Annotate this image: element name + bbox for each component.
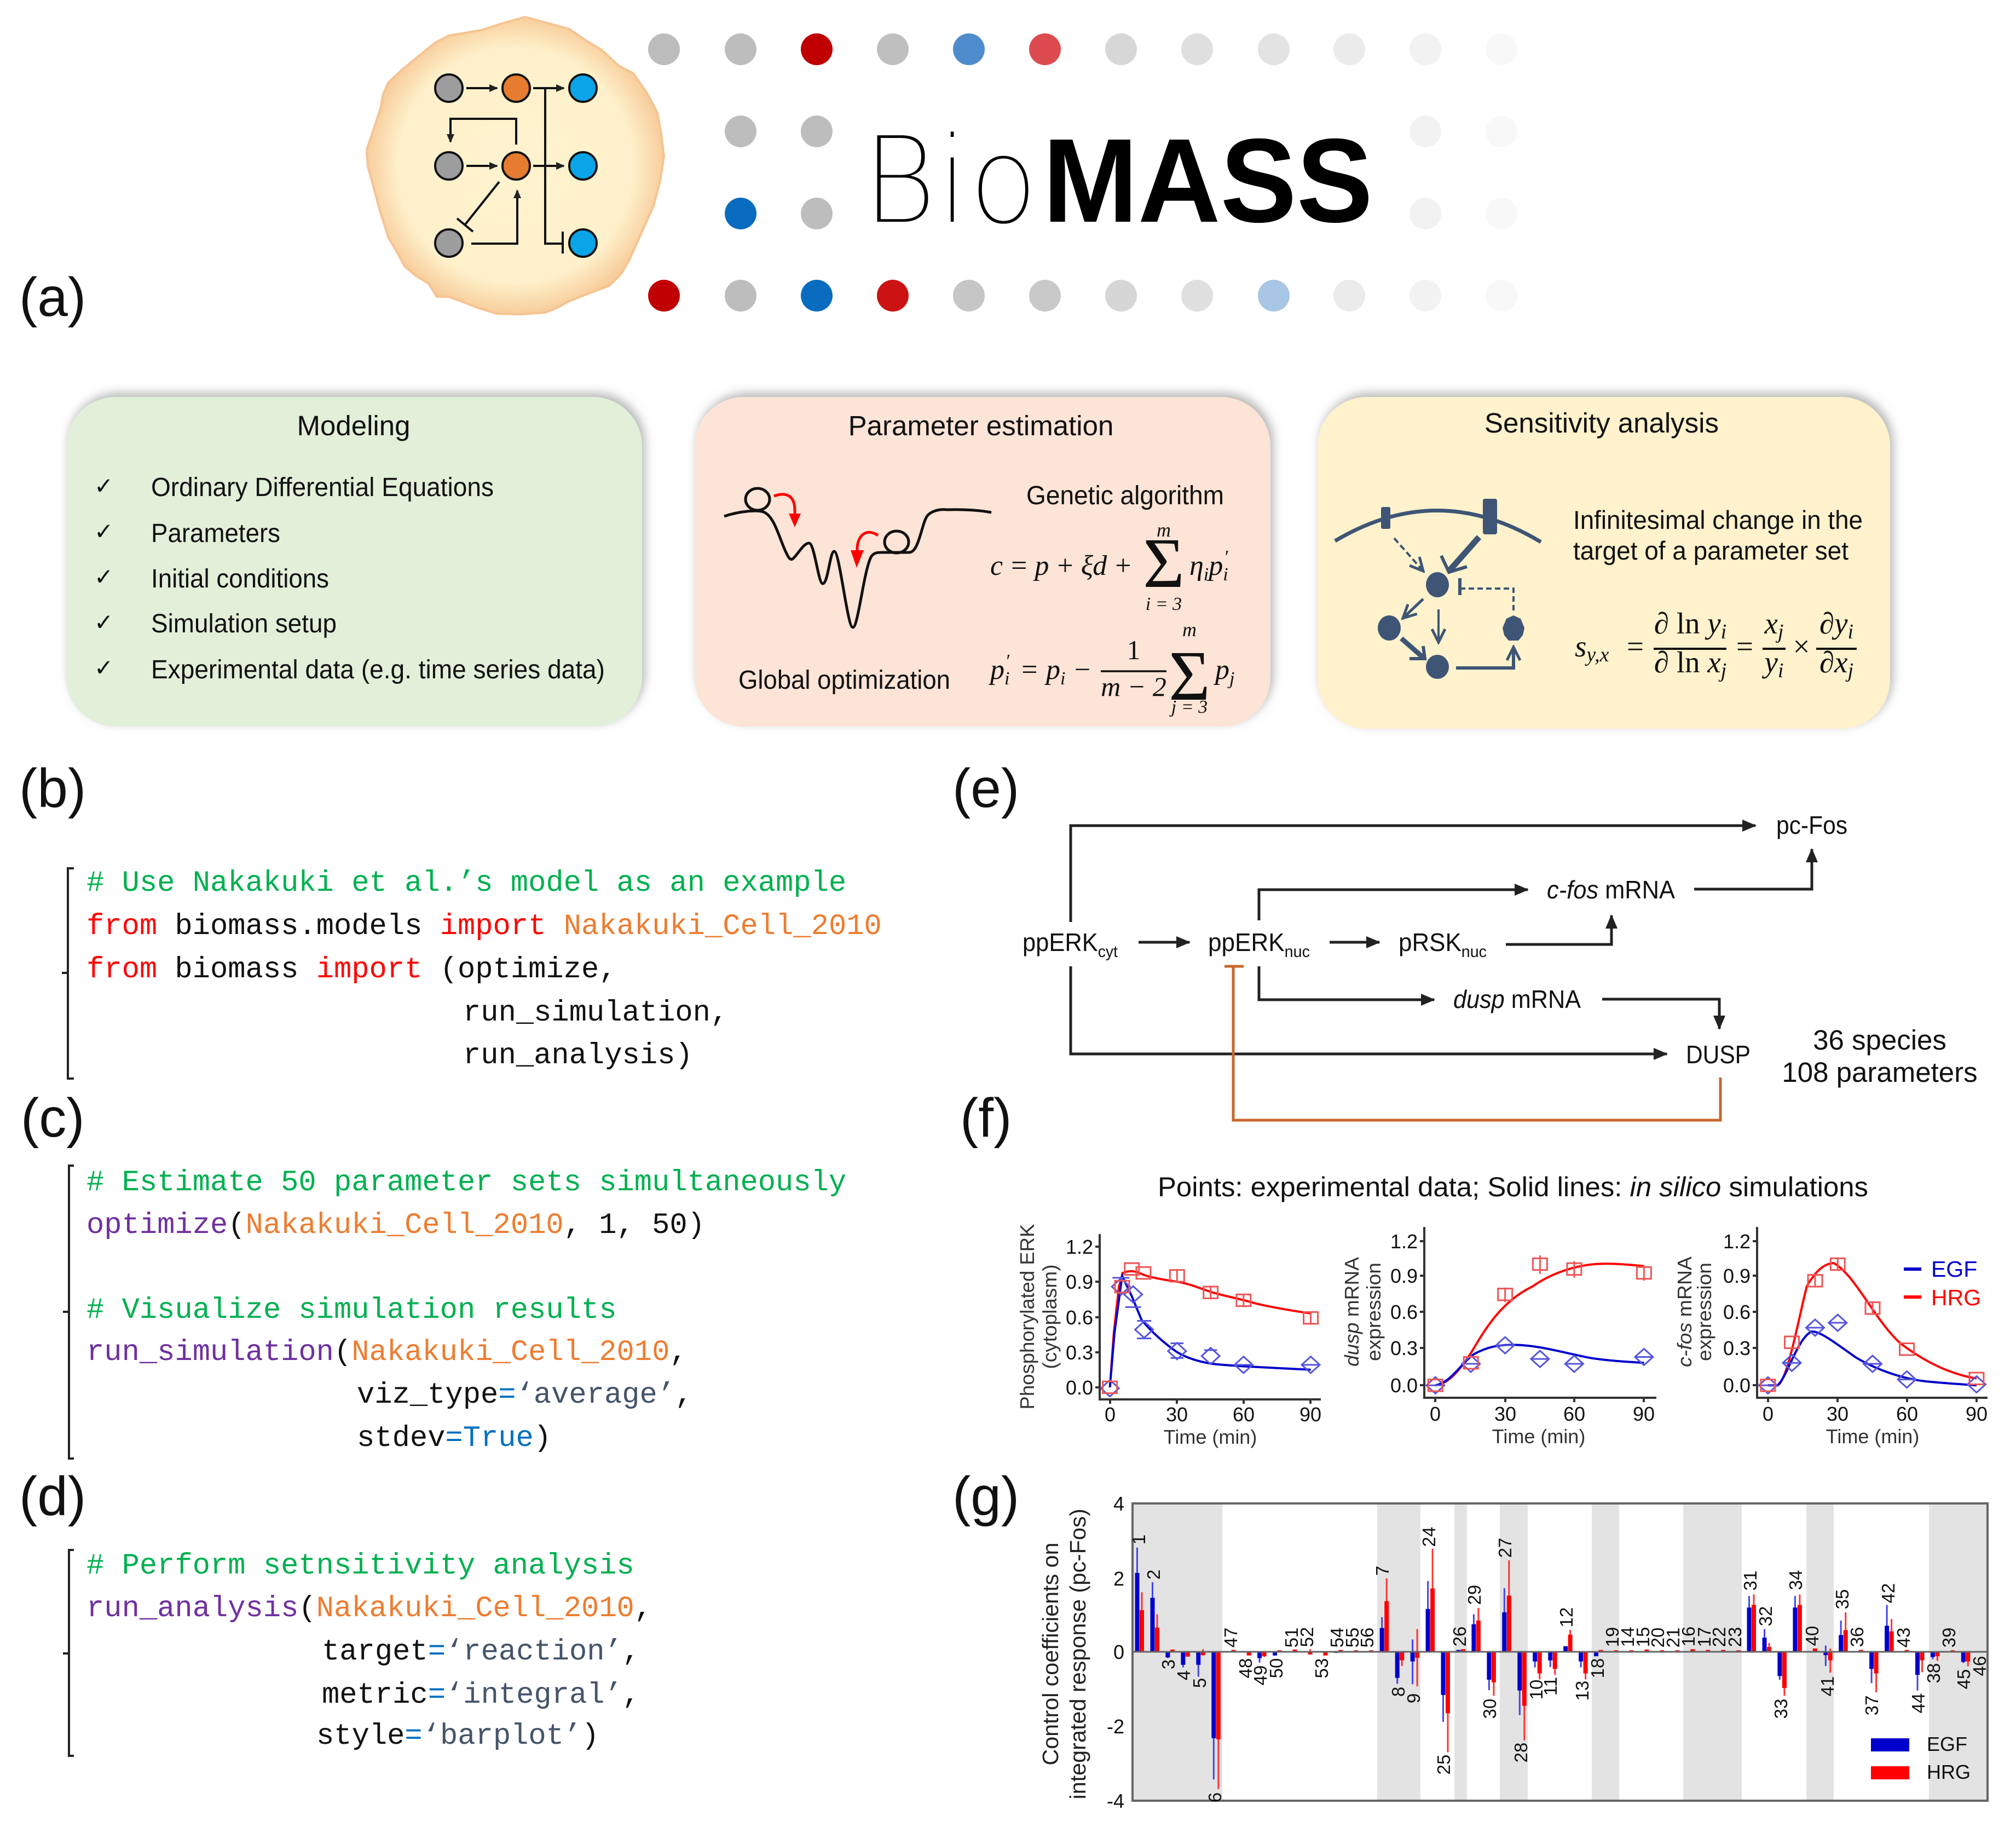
line chart: c-fos mRNA: 0.3 [1723,1337,1751,1359]
bar labels: 35 [1832,1589,1852,1609]
bar labels: 40 [1802,1626,1822,1646]
bar labels: 39 [1939,1628,1959,1647]
formula: sensitivity coefficient: = [1627,630,1644,663]
code block d: metric=‘integral’, [322,1679,640,1712]
axis labels: 0 [1113,1641,1124,1663]
legend: EGF / HRG bars: EGF [1927,1733,1967,1755]
checklist: ✓ [94,472,113,499]
bar labels: 50 [1266,1658,1286,1678]
line chart: c-fos mRNA: 0 [1763,1403,1774,1425]
formula: crossover: c = p + ξd + [990,550,1133,581]
pathway diagram: cyt [1098,943,1118,961]
formula: sensitivity coefficient: ∂ ln y [1654,607,1721,640]
bar labels: 49 [1250,1665,1270,1685]
axis labels: 4 [1113,1492,1124,1515]
checklist: Experimental data (e.g. time series data) [151,655,605,684]
bar labels: 27 [1495,1538,1515,1558]
bar labels: 18 [1587,1658,1608,1678]
line chart: dusp mRNA: dusp mRNA [1341,1257,1363,1367]
formula: sensitivity coefficient: ∂ ln x [1654,645,1721,679]
pathway diagram: pc-Fos [1776,811,1847,839]
caption: Genetic algorithm: Genetic algorithm [1026,481,1224,510]
code block c: viz_type=‘average’, [357,1379,692,1412]
bar labels: 24 [1419,1527,1439,1547]
bar labels: 7 [1372,1566,1393,1576]
heading: Parameter estimation: Parameter estimation [848,410,1113,441]
code block d [63,1549,652,1756]
formula: crossover [990,519,1228,614]
panel label: (d): (d) [19,1466,86,1527]
bar labels: 32 [1755,1606,1776,1626]
bar labels: 4 [1174,1670,1194,1680]
formula: mutation: m [1182,619,1197,641]
formula: mutation: 1 [1127,635,1141,665]
formula: crossover: m [1157,519,1171,541]
bar labels: 43 [1893,1628,1914,1647]
bar labels: 23 [1725,1627,1745,1647]
bar labels: 28 [1511,1743,1531,1762]
line chart: dusp mRNA: expression [1362,1263,1385,1361]
formula: sensitivity coefficient: ∂y [1819,607,1848,640]
bars and error bars [1137,1548,1983,1789]
formula: mutation: m − 2 [1101,671,1166,702]
checklist: ✓ [94,609,113,636]
bar labels: 19 [1602,1627,1622,1647]
formula: mutation: − [1065,654,1092,685]
bar labels: 56 [1357,1628,1377,1647]
code block c: stdev=True) [357,1422,551,1455]
code block c: # Visualize simulation results [86,1294,617,1327]
pathway diagram: dusp mRNA [1453,985,1581,1013]
bar labels [1129,1527,1990,1802]
code block b: run_analysis) [463,1039,693,1073]
formula: mutation [988,619,1234,717]
line chart: dusp mRNA: 60 [1563,1403,1585,1425]
line chart: phosphorylated ERK: 0.3 [1066,1341,1093,1364]
line chart: c-fos mRNA: 30 [1827,1403,1849,1425]
formula: sensitivity coefficient: j [1718,659,1726,682]
formula: crossover: i [1204,564,1209,585]
heading: Sensitivity analysis: Sensitivity analysis [1484,407,1719,439]
axes frame [1133,1503,1988,1801]
legend: EGF / HRG bars [1871,1733,1971,1783]
panel: Modeling [66,397,642,727]
axis labels: 2 [1113,1567,1124,1590]
bar labels: 37 [1862,1696,1882,1715]
bar labels: 16 [1678,1627,1699,1646]
diagram: optimization landscape [724,488,991,627]
formula: sensitivity coefficient: y [1765,645,1778,679]
formula: mutation: p [990,654,1004,685]
formula: sensitivity coefficient: j [1775,620,1783,643]
line chart: c-fos mRNA: expression [1693,1263,1715,1361]
panel: Parameter estimation [695,397,1270,727]
bar labels: 11 [1540,1677,1561,1696]
formula: mutation: i [1004,668,1009,689]
pathway diagram: nuc [1285,943,1310,961]
pathway diagram [1023,811,1978,1120]
line chart: phosphorylated ERK: 0 [1105,1403,1116,1426]
stats text: 36 species [1813,1024,1946,1056]
line chart: c-fos mRNA [1673,1227,1988,1448]
checklist: ✓ [94,518,113,545]
formula: crossover: Σ [1143,524,1185,603]
line chart: c-fos mRNA: 90 [1966,1403,1988,1425]
line chart: dusp mRNA: 0.3 [1390,1337,1418,1359]
stats text [1782,1024,1978,1088]
text: Infinitesimal change [1573,505,1863,565]
bar labels: 29 [1464,1585,1484,1605]
bar labels: 22 [1709,1627,1729,1647]
panel label: (g): (g) [952,1466,1019,1527]
line chart: phosphorylated ERK [1016,1224,1321,1448]
bar labels: 10 [1526,1680,1546,1699]
bar labels: 12 [1556,1607,1576,1627]
bar labels: 34 [1786,1570,1806,1590]
bar labels: 36 [1847,1627,1867,1647]
pathway diagram: nuc [1462,943,1487,961]
line chart: dusp mRNA: Time (min) [1492,1425,1585,1448]
panel label: (c): (c) [21,1087,85,1149]
axis labels: -2 [1107,1715,1124,1738]
line chart: dusp mRNA: 0.0 [1390,1374,1418,1397]
checklist: ✓ [94,563,113,590]
line chart: phosphorylated ERK: 90 [1299,1403,1321,1426]
bar labels: 47 [1221,1628,1241,1647]
panel label: (f): (f) [960,1087,1012,1149]
wordmark [862,111,1373,252]
legend: EGF / HRG: HRG [1931,1285,1981,1310]
bar labels: 41 [1817,1676,1838,1696]
wordmark: Bio [862,111,1038,252]
formula: sensitivity coefficient: × [1793,630,1810,663]
line chart: c-fos mRNA: c-fos mRNA [1673,1257,1696,1367]
bar chart: control coefficients: Control coefficients on [1038,1543,1063,1765]
checklist [94,472,605,684]
bar labels: 3 [1158,1659,1179,1669]
formula: sensitivity coefficient: s [1575,630,1586,663]
legend: EGF / HRG: EGF [1931,1257,1977,1282]
formula: mutation: j [1227,668,1234,689]
bar labels: 45 [1954,1669,1974,1689]
line chart: c-fos mRNA: 1.2 [1723,1230,1751,1253]
line chart: dusp mRNA: 1.2 [1390,1230,1418,1253]
text: Infinitesimal change: Infinitesimal change in the [1573,505,1863,534]
checklist: Ordinary Differential Equations [151,473,494,502]
formula: mutation: j = 3 [1169,697,1208,717]
formula: crossover: p [1206,550,1223,581]
axis labels [1107,1492,1124,1812]
line chart: dusp mRNA: 0.6 [1390,1301,1418,1323]
code block c: # Estimate 50 parameter sets simultaneously [86,1166,846,1200]
bar labels: 48 [1235,1658,1256,1678]
diagram: signaling network [1335,499,1541,679]
line chart: phosphorylated ERK: 0.0 [1066,1376,1093,1399]
bar labels: 9 [1403,1693,1424,1703]
formula: sensitivity coefficient: x [1765,607,1778,640]
panel label: (e): (e) [952,758,1019,819]
formula: mutation: = p [1013,654,1060,685]
bar labels: 55 [1342,1628,1362,1647]
code block c [63,1166,846,1459]
bar labels: 2 [1143,1570,1164,1580]
code block b: # Use Nakakuki et al.’s model as an example [86,867,846,900]
bar labels: 5 [1189,1678,1210,1688]
pathway diagram: DUSP [1686,1040,1751,1069]
line chart: phosphorylated ERK: (cytoplasm) [1038,1265,1061,1369]
formula: mutation: ′ [1005,651,1009,671]
line chart: phosphorylated ERK: 60 [1233,1403,1255,1426]
line chart: c-fos mRNA: 0.6 [1723,1301,1751,1323]
formula: mutation: i [1060,668,1065,689]
line chart: phosphorylated ERK: 30 [1166,1403,1188,1426]
bar labels: 42 [1878,1583,1898,1603]
pathway diagram: ppERK [1023,928,1102,956]
formula: crossover: i = 3 [1146,594,1182,614]
formula: mutation: p [1215,654,1229,685]
formula: sensitivity coefficient: ∂x [1819,645,1848,679]
line chart: phosphorylated ERK: Phosphorylated ERK [1016,1224,1038,1409]
bar labels: 26 [1449,1627,1470,1646]
bar labels: 46 [1969,1656,1990,1676]
line chart: phosphorylated ERK: 0.6 [1066,1306,1093,1329]
line chart: dusp mRNA: 90 [1633,1403,1655,1425]
bar labels: 51 [1281,1628,1302,1647]
text: Infinitesimal change: target of a parameter set [1573,536,1849,565]
panel: Sensitivity analysis [1318,397,1890,729]
pathway diagram: pRSK [1399,928,1464,956]
code block b [62,867,882,1079]
formula: sensitivity coefficient: = [1736,630,1753,663]
line chart: dusp mRNA: 0 [1430,1403,1441,1425]
code block d: # Perform setnsitivity analysis [86,1549,634,1583]
logo: BioMASS [367,17,1517,314]
formula: mutation: Σ [1169,637,1210,716]
bar labels: 21 [1663,1628,1683,1647]
code block b: from biomass.models import Nakakuki_Cell_2010 [86,910,882,943]
shaded reaction groups [1133,1503,1988,1801]
bar labels: 17 [1694,1627,1714,1647]
panel label: (a): (a) [19,267,86,328]
line chart: c-fos mRNA: 60 [1896,1403,1918,1425]
heading: Modeling: Modeling [297,410,410,441]
dot grid [648,33,1517,312]
checklist: Parameters [151,519,280,548]
formula: sensitivity coefficient: i [1721,620,1726,643]
checklist: ✓ [94,654,113,681]
line chart: dusp mRNA [1341,1227,1656,1448]
line chart: c-fos mRNA: 0.0 [1723,1374,1751,1397]
legend: EGF / HRG bars: HRG [1927,1761,1971,1783]
wordmark: MASS [1043,114,1373,247]
legend: EGF / HRG [1904,1257,1981,1310]
bar labels: 8 [1388,1687,1408,1697]
pathway diagram: ppERK [1208,928,1288,956]
line chart: phosphorylated ERK: Time (min) [1164,1426,1257,1448]
bar labels: 25 [1434,1755,1454,1774]
formula: sensitivity coefficient [1575,607,1857,682]
bar labels: 20 [1648,1628,1668,1647]
bar labels: 38 [1923,1663,1944,1683]
bar labels: 44 [1908,1693,1928,1713]
line chart: c-fos mRNA: Time (min) [1826,1425,1919,1448]
bar labels: 15 [1633,1627,1653,1647]
code block d: style=‘barplot’) [316,1720,599,1753]
bar labels: 1 [1129,1535,1149,1544]
icon: cell with signaling network [367,17,664,314]
pathway diagram: c-fos mRNA [1547,875,1675,904]
checklist: Simulation setup [151,609,337,638]
bar labels: 33 [1771,1699,1791,1719]
code block c: optimize(Nakakuki_Cell_2010, 1, 50) [86,1209,705,1242]
formula: crossover: η [1189,550,1204,581]
bar chart: control coefficients [1038,1492,1990,1812]
bar chart: control coefficients: integrated response (pc-Fos) [1065,1509,1090,1799]
checklist: Initial conditions [151,564,329,593]
bar labels: 13 [1572,1681,1592,1701]
line chart: dusp mRNA: 30 [1494,1403,1516,1425]
line chart: phosphorylated ERK: 1.2 [1066,1236,1093,1258]
formula: sensitivity coefficient: y,x [1584,643,1609,666]
caption: Global optimization: Global optimization [738,666,950,695]
formula: sensitivity coefficient: j [1845,659,1853,682]
code block b: run_simulation, [463,996,728,1030]
axis labels: -4 [1107,1790,1124,1812]
code block b: from biomass import (optimize, [86,953,617,987]
formula: crossover: i [1223,564,1228,585]
line chart: phosphorylated ERK: 0.9 [1066,1271,1093,1293]
stats text: 108 parameters [1782,1057,1978,1088]
bar labels: 14 [1618,1627,1638,1647]
line chart: dusp mRNA: 0.9 [1390,1265,1418,1287]
code block d: run_analysis(Nakakuki_Cell_2010, [86,1592,652,1626]
chart title: Points: experimental data; Solid lines: in silico simulations [1158,1172,1868,1202]
line chart: c-fos mRNA: 0.9 [1723,1265,1751,1287]
bar labels: 53 [1312,1658,1332,1678]
code block d: target=‘reaction’, [322,1635,640,1669]
formula: crossover: ′ [1224,547,1228,567]
formula: sensitivity coefficient: i [1848,620,1853,643]
bar labels: 52 [1297,1627,1317,1647]
bar labels: 31 [1740,1571,1760,1590]
bar labels: 30 [1480,1699,1500,1719]
formula: sensitivity coefficient: i [1778,659,1783,682]
bar labels: 54 [1327,1628,1347,1647]
code block c: run_simulation(Nakakuki_Cell_2010, [86,1336,688,1369]
panel label: (b): (b) [19,758,86,819]
bar labels: 6 [1205,1793,1225,1802]
